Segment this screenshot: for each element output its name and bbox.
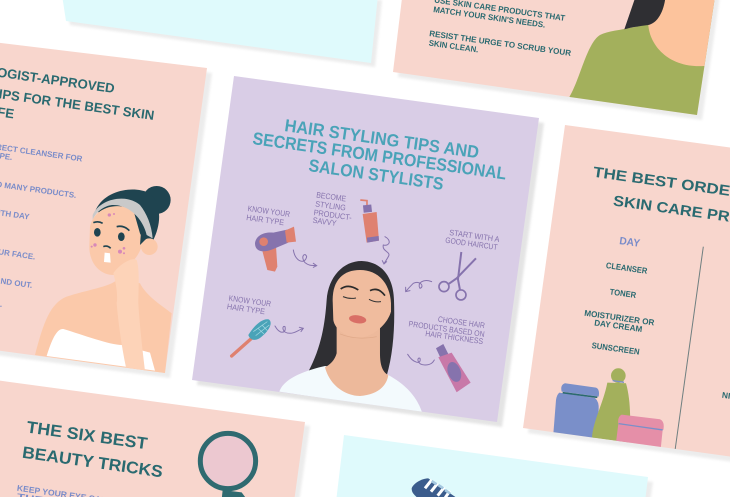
labels: hair tips: GOOD HAIRCUT xyxy=(445,236,498,252)
icon: skin care products xyxy=(553,368,664,449)
labels: hair tips xyxy=(226,190,501,346)
heading: hair styling tips: HAIR STYLING TIPS AND xyxy=(283,115,480,162)
text block: day routine: SUNSCREEN xyxy=(591,340,640,357)
labels: hair tips: CHOOSE HAIR xyxy=(437,315,486,330)
panel: dermatologist tips card left xyxy=(0,38,212,378)
text block: day routine: DAY CREAM xyxy=(594,317,643,334)
panel: cyan card top left xyxy=(62,0,382,67)
labels: hair tips: KNOW YOUR xyxy=(247,204,291,219)
heading: hair styling tips: SALON STYLISTS xyxy=(307,155,445,194)
illustration group: center card in zoom coordinates xyxy=(226,190,501,413)
illustration: woman with acne xyxy=(35,186,172,373)
text block: skin care tips: RESIST THE URGE TO SCRUB YOUR xyxy=(429,29,572,58)
illustration: woman with closed eyes xyxy=(279,261,422,413)
panel: cyan card bottom center xyxy=(336,435,653,497)
labels: hair tips: SAVVY xyxy=(312,216,338,228)
icon: comb brush xyxy=(412,478,458,497)
heading: six best beauty tricks: BEAUTY TRICKS xyxy=(21,443,164,481)
heading: six best beauty tricks: THE SIX BEST xyxy=(25,417,149,453)
labels: hair tips: STYLING xyxy=(315,199,346,213)
text block: skin care tips: MATCH YOUR SKIN'S NEEDS. xyxy=(433,5,546,30)
labels: hair tips: KNOW YOUR xyxy=(228,294,272,309)
labels: hair tips: HAIR TYPE xyxy=(226,302,266,316)
icon: shampoo bottle xyxy=(436,344,471,392)
panel: skin care tips card top right xyxy=(393,0,720,120)
text block: day routine: MOISTURIZER OR xyxy=(584,308,655,327)
labels: hair tips: PRODUCTS BASED ON xyxy=(408,319,485,339)
text block: day routine: CLEANSER xyxy=(605,260,648,276)
labels: hair tips: HAIR TYPE xyxy=(246,213,285,227)
labels: hair tips: START WITH A xyxy=(449,228,501,244)
icon: pump bottle xyxy=(360,200,379,243)
text block: skin care tips xyxy=(428,0,572,58)
heading: six best beauty tricks xyxy=(21,417,164,481)
illustration: woman in green top xyxy=(569,0,717,120)
icon: hand mirror xyxy=(200,433,256,497)
text block: day routine: TONER xyxy=(609,286,637,300)
panel: six best beauty tricks card bottom left xyxy=(0,380,310,497)
panel: skin care order card right xyxy=(523,125,730,467)
labels: hair tips: BECOME xyxy=(316,190,347,203)
heading: dermatologist tips xyxy=(0,54,155,123)
text block: day routine: DAY xyxy=(619,235,641,250)
labels: hair tips: HAIR THICKNESS xyxy=(425,329,484,346)
heading: hair styling tips xyxy=(251,115,508,194)
icon: hair brush xyxy=(232,319,271,356)
text block: day routine xyxy=(584,235,730,403)
icon: hair dryer xyxy=(255,227,296,272)
panel: hair styling tips card center xyxy=(192,76,544,427)
text block: skin care tips: SKIN CLEAN. xyxy=(428,39,479,54)
text block: tips list xyxy=(0,135,83,309)
labels: hair tips: PRODUCT- xyxy=(313,208,353,222)
heading: hair styling tips: SECRETS FROM PROFESSIONAL xyxy=(251,128,508,184)
heading: best order of skin care products xyxy=(594,166,730,222)
icon: scissors xyxy=(439,252,476,300)
arrows: swirls xyxy=(275,237,434,365)
divider: day and night xyxy=(675,247,703,451)
